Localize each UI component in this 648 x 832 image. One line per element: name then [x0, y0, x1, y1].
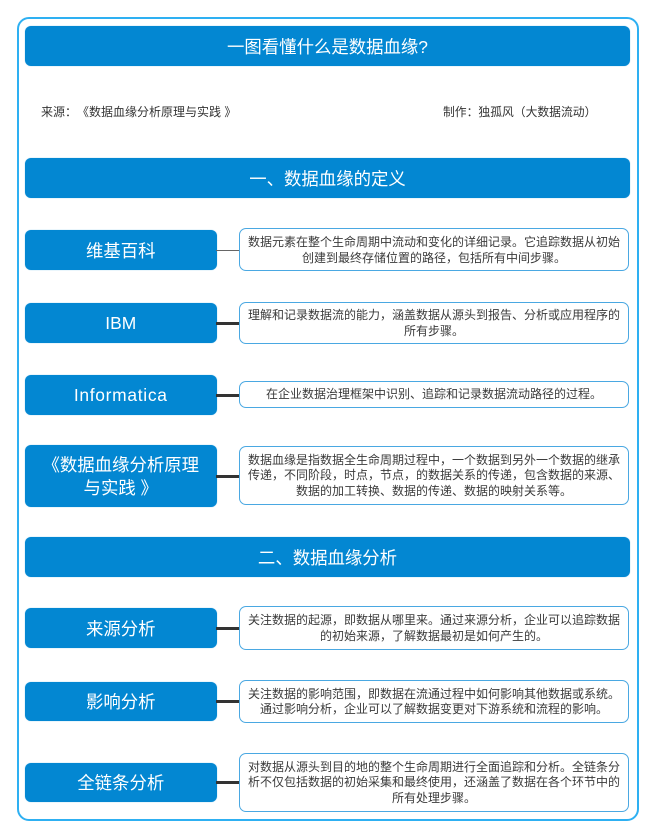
definition: full-chain analysis: 对数据从源头到目的地的整个生命周期进行全面追踪和分析。全链条分 [248, 760, 620, 774]
definition: full-chain analysis: 所有处理步骤。 [392, 791, 476, 805]
definition: impact analysis: 关注数据的影响范围，即数据在流通过程中如何影响其他数据或系统。 [248, 687, 620, 701]
label: book [25, 445, 216, 506]
definition: source analysis: 关注数据的起源，即数据从哪里来。通过来源分析，企业可以追踪数据 [248, 613, 620, 627]
label: full-chain analysis [25, 762, 216, 802]
label: Informatica: Informatica [74, 385, 168, 405]
label: source analysis [25, 608, 216, 648]
label: impact analysis [25, 682, 216, 721]
definition: impact analysis: 通过影响分析，企业可以了解数据变更对下游系统和流程的影响。 [260, 702, 608, 716]
definition: source analysis: 的初始来源，了解数据最初是如何产生的。 [320, 629, 548, 643]
definition: IBM: 理解和记录数据流的能力，涵盖数据从源头到报告、分析或应用程序的 [248, 308, 620, 322]
label: Wikipedia: 维基百科 [86, 240, 156, 260]
connector: Informatica [216, 394, 240, 396]
definition: impact analysis [239, 680, 629, 723]
section heading: definition [25, 158, 630, 198]
label: Wikipedia [25, 230, 216, 270]
label: Informatica [25, 375, 216, 414]
label: book: 《数据血缘分析原理 [42, 455, 199, 475]
section heading: analysis: 二、数据血缘分析 [258, 548, 397, 568]
definition: Wikipedia: 数据元素在整个生命周期中流动和变化的详细记录。它追踪数据从初始 [248, 235, 620, 249]
label: impact analysis: 影响分析 [86, 692, 156, 712]
definition: book: 数据血缘是指数据全生命周期过程中，一个数据到另外一个数据的继承 [248, 453, 620, 467]
definition: source analysis [239, 606, 629, 650]
source note: 来源：《数据血缘分析原理与实践 》 [41, 105, 236, 119]
connector: impact analysis [216, 700, 240, 703]
definition: IBM [239, 302, 629, 344]
title: 一图看懂什么是数据血缘? [227, 37, 428, 57]
connector: full-chain analysis [216, 781, 240, 784]
label: IBM [25, 303, 216, 342]
connector: IBM [216, 322, 240, 324]
definition: book: 数据的加工转换、数据的传递、数据的映射关系等。 [296, 484, 572, 498]
definition: book [239, 446, 629, 504]
title [25, 26, 630, 66]
label: IBM: IBM [105, 313, 136, 333]
definition: Informatica [239, 380, 629, 408]
author note: 制作：独孤风（大数据流动） [443, 105, 596, 119]
connector: source analysis [216, 627, 240, 630]
definition: full-chain analysis: 析不仅包括数据的初始采集和最终使用，还涵盖了数据在各个环节中的 [248, 775, 620, 789]
definition: Informatica: 在企业数据治理框架中识别、追踪和记录数据流动路径的过程。 [266, 387, 602, 401]
label: full-chain analysis: 全链条分析 [77, 773, 164, 793]
label: source analysis: 来源分析 [86, 618, 156, 638]
definition: Wikipedia: 创建到最终存储位置的路径，包括所有中间步骤。 [302, 250, 566, 264]
definition: full-chain analysis [239, 752, 629, 812]
definition: book: 传递，不同阶段，时点，节点，的数据关系的传递，包含数据的来源、 [248, 468, 620, 482]
label: book: 与实践 》 [84, 478, 158, 498]
connector: Wikipedia [216, 250, 240, 251]
definition: IBM: 所有步骤。 [404, 324, 464, 338]
connector: book [216, 474, 240, 478]
section heading: definition: 一、数据血缘的定义 [249, 169, 406, 189]
section heading: analysis [25, 536, 630, 576]
definition: Wikipedia [239, 228, 629, 271]
